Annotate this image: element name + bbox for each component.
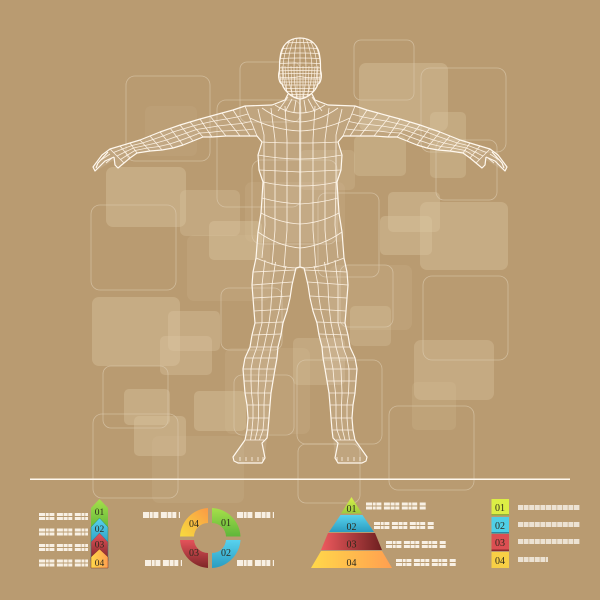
- arrow 01: 01: [95, 508, 104, 518]
- head mesh: [275, 38, 325, 99]
- left half of body mesh: [93, 94, 300, 463]
- wireframe human figure: [93, 38, 507, 463]
- pyramid layer 04: 04: [346, 558, 356, 569]
- square 03: 03: [495, 538, 505, 549]
- pyramid captions: [366, 504, 456, 564]
- ring segment 04: 04: [189, 519, 199, 530]
- ring segment 01: 01: [221, 518, 231, 529]
- arrow 02: 02: [95, 525, 104, 535]
- square 01: 01: [495, 503, 505, 514]
- pyramid layer 01: 01: [346, 504, 356, 515]
- square captions: [518, 508, 580, 560]
- right half of body mesh: [300, 94, 507, 463]
- arrow 04: 04: [95, 559, 104, 569]
- panel: numbered squares: [492, 499, 509, 568]
- square 02: 02: [495, 521, 505, 532]
- panel: arrow stack: [91, 499, 108, 569]
- ring segment 03: 03: [189, 548, 199, 559]
- outlined rounded squares: [91, 40, 508, 503]
- ring segment 02: 02: [221, 548, 231, 559]
- horizontal divider line: [30, 478, 570, 480]
- panel: pyramid: [311, 497, 392, 569]
- square 04: 04: [495, 556, 505, 567]
- pyramid layer 02: 02: [346, 522, 356, 533]
- arrow stack captions: [39, 514, 88, 565]
- arrow 03: 03: [95, 540, 104, 550]
- ring chart captions: [143, 514, 274, 564]
- translucent filled squares: [92, 63, 508, 503]
- center line: [299, 99, 301, 267]
- panel: ring chart: [180, 508, 240, 568]
- pyramid layer 03: 03: [346, 540, 356, 550]
